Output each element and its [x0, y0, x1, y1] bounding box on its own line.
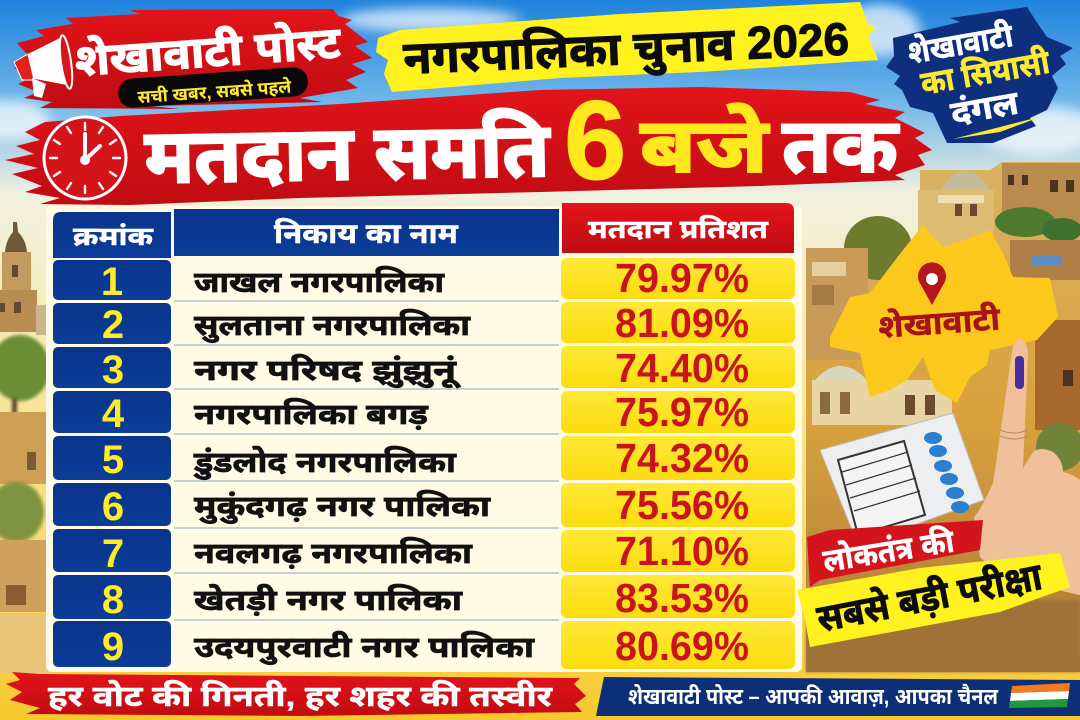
row 2: 2: [102, 303, 124, 347]
row 1: 79.97%: [615, 255, 749, 301]
row 1: जाखल नगरपालिका: [194, 266, 445, 299]
logo tagline pill: [117, 66, 309, 109]
row 4: नगरपालिका बगड़: [194, 398, 429, 431]
badge: siyasi dangal: [886, 7, 1073, 143]
headline text yellow baje: बजे: [640, 104, 770, 189]
row 2: 81.09%: [615, 300, 749, 346]
row 3: नगर परिषद झुंझुनूं: [194, 354, 461, 388]
logo: Shekhawati Post brush banner: [14, 9, 372, 109]
headline text white: मतदान समति: [144, 108, 552, 200]
row 1: [53, 255, 795, 304]
row 4: 75.97%: [615, 389, 749, 435]
header: turnout: मतदान प्रतिशत: [588, 214, 769, 244]
logo title: शेखावाटी पोस्ट: [73, 16, 343, 86]
row 7: 71.10%: [615, 528, 749, 574]
row 4: 4: [102, 392, 125, 436]
row 2: [53, 300, 795, 347]
row 6: 6: [102, 485, 124, 529]
election title on yellow brush: नगरपालिका चुनाव 2026: [402, 13, 850, 86]
row 5: [53, 435, 795, 482]
footer navy banner: [596, 677, 1080, 716]
icon: megaphone: [14, 35, 75, 98]
row 6: [53, 482, 795, 529]
left town illustration: [0, 222, 50, 673]
row 8: 8: [102, 578, 124, 622]
icon: clock: [44, 117, 126, 199]
row 3: [53, 345, 795, 392]
header: serial: क्रमांक: [73, 221, 153, 251]
logo tagline pill: सची खबर, सबसे पहले: [137, 77, 293, 107]
yellow swoosh: [953, 116, 1043, 139]
illustration: EVM ballot unit: [820, 413, 984, 545]
slogan: loktantra ki: लोकतंत्र की: [820, 523, 957, 579]
white temple: [812, 366, 952, 425]
row 8: [53, 575, 795, 622]
footer navy banner: शेखावाटी पोस्ट – आपकी आवाज़, आपका चैनल: [628, 683, 999, 709]
badge: siyasi dangal: शेखावाटी: [905, 17, 1016, 71]
row 7: [53, 528, 795, 576]
headline banner: [5, 78, 932, 205]
footer red banner: हर वोट की गिनती, हर शहर की तस्वीर: [48, 680, 553, 713]
row 5: 5: [102, 438, 124, 482]
badge: siyasi dangal: का सियासी: [918, 43, 1053, 102]
row 6: मुकुंदगढ़ नगर पालिका: [194, 490, 491, 524]
row 8: खेतड़ी नगर पालिका: [194, 583, 463, 617]
row 6: 75.56%: [615, 482, 749, 528]
row 4: [53, 389, 795, 436]
palace: [918, 171, 994, 250]
row 7: 7: [102, 532, 124, 576]
clouds: [0, 4, 1080, 154]
row 3: 3: [102, 348, 124, 392]
havelis: [1002, 163, 1080, 228]
header: turnout: [562, 203, 794, 253]
table background: [46, 206, 802, 672]
map: Shekhawati yellow region: [830, 225, 1058, 403]
right town illustration: [806, 162, 1080, 672]
row 9: 80.69%: [615, 623, 749, 669]
row 7: नवलगढ़ नगरपालिका: [194, 537, 473, 570]
badge: siyasi dangal: दंगल: [948, 84, 1022, 132]
row 9: उदयपुरवाटी नगर पालिका: [194, 631, 535, 665]
tower: [0, 222, 37, 332]
icon: location pin: [918, 262, 946, 305]
tree: [0, 335, 50, 414]
results table: [46, 203, 802, 672]
row 5: डुंडलोद नगरपालिका: [193, 446, 457, 480]
illustration: inked finger: [974, 338, 1080, 595]
row 8: 83.53%: [615, 575, 749, 621]
footer red banner: [6, 672, 586, 716]
row 3: 74.40%: [615, 345, 749, 391]
map label: शेखावाटी: [877, 301, 1002, 345]
header: body name: [174, 209, 559, 256]
icon: Indian flag: [1009, 683, 1070, 708]
row 1: 1: [101, 260, 123, 304]
headline text white tak: तक: [782, 104, 900, 189]
row 9: 9: [102, 625, 124, 669]
row 9: [53, 621, 795, 669]
row 2: सुलताना नगरपालिका: [194, 309, 471, 343]
slogan: sabse badi pariksha: सबसे बड़ी परीक्षा: [813, 554, 1046, 641]
row 5: 74.32%: [615, 435, 749, 481]
header: body name: निकाय का नाम: [274, 217, 459, 249]
headline digit 6: 6: [564, 78, 626, 203]
header: serial: [53, 212, 171, 258]
